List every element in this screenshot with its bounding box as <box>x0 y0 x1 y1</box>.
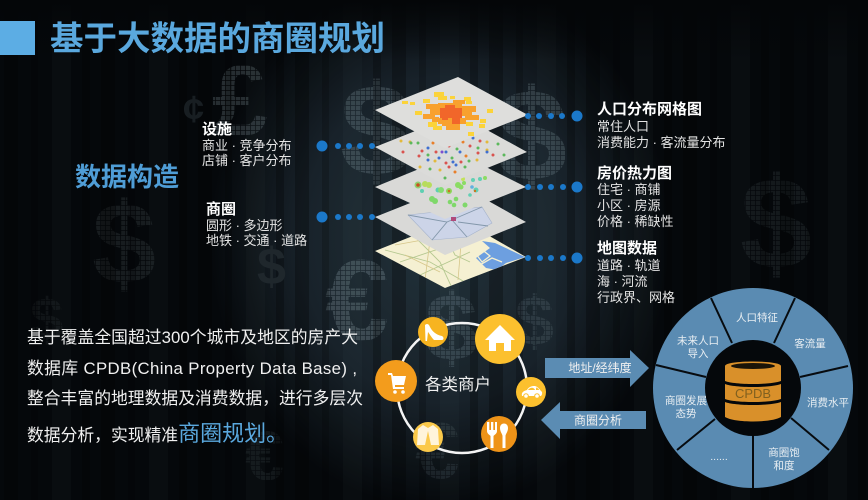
layer: house price heat map <box>375 153 526 219</box>
text block: 商圈: 商圈 <box>206 200 236 218</box>
wheel segment labels: 商圈发展 <box>665 394 707 407</box>
text block: 地图数据: 海 · 河流 <box>597 274 648 289</box>
background: dark dotted currency pattern: $ <box>92 180 156 308</box>
title: 基于大数据的商圈规划 <box>50 21 385 58</box>
text block: 地图数据: 行政界、网格 <box>597 290 675 305</box>
text block: 人口分布网格图: 消费能力 · 客流量分布 <box>597 135 726 150</box>
text block: 设施: 店铺 · 客户分布 <box>202 153 292 168</box>
connector dots: population grid <box>525 110 582 122</box>
icon: car <box>516 377 546 407</box>
text block: 设施: 设施 <box>202 120 232 138</box>
text block: 房价热力图 <box>597 164 674 229</box>
wheel segment labels: 态势 <box>676 407 697 420</box>
background: dark dotted currency pattern: £ <box>212 45 268 157</box>
wheel segment labels: 消费水平 <box>807 396 849 409</box>
connector dots: trade area <box>316 212 375 222</box>
text block: 房价热力图: 房价热力图 <box>597 164 672 182</box>
background: dark dotted currency pattern: € <box>245 417 284 495</box>
text block: 商圈: 地铁 · 交通 · 道路 <box>206 233 307 248</box>
description paragraph <box>27 328 363 446</box>
background: dark dotted currency pattern: $ <box>425 275 478 381</box>
icon: shopping cart <box>375 360 417 402</box>
background: dark dotted currency pattern: € <box>415 406 460 495</box>
arrow: trade area analysis <box>541 402 646 439</box>
arrow: address / coordinates <box>545 350 649 387</box>
icon: high heel <box>418 317 448 347</box>
CPDB data wheel <box>653 288 853 488</box>
background: dark dotted currency pattern: $ <box>340 57 412 203</box>
background: dark dotted currency pattern: $ <box>30 286 63 353</box>
wheel segment labels: 人口特征 <box>736 312 778 324</box>
layer stack <box>375 77 528 288</box>
background: dark dotted currency pattern: ¢ <box>183 89 204 131</box>
ring label: 各类商户 <box>425 375 491 394</box>
wheel segment labels: 导入 <box>688 348 709 360</box>
text block: 房价热力图: 小区 · 房源 <box>597 198 661 213</box>
layer: map data <box>375 236 526 288</box>
text block: 房价热力图: 住宅 · 商铺 <box>597 182 661 197</box>
layer: facility dots <box>375 114 527 185</box>
text block: 设施: 商业 · 竞争分布 <box>202 138 292 153</box>
text block: 设施 <box>202 120 292 168</box>
wheel segment labels: 客流量 <box>794 337 826 350</box>
arrow: trade area analysis: 商圈分析 <box>574 412 622 428</box>
connector dots: facilities <box>316 140 375 152</box>
merchant ring <box>375 314 546 453</box>
description paragraph: 数据分析，实现精准商圈规划。 <box>27 421 288 446</box>
text block: 商圈 <box>206 200 307 248</box>
wheel segment labels: 和度 <box>774 459 795 472</box>
title marker square <box>0 21 35 55</box>
icon: CPDB database cylinder <box>725 362 781 422</box>
wheel segment labels: ...... <box>710 451 728 463</box>
wheel segment labels: 商圈饱 <box>768 446 800 459</box>
text block: 地图数据: 道路 · 轨道 <box>597 258 661 273</box>
layer: trade area polygons <box>375 184 526 255</box>
icon: jacket <box>413 422 443 452</box>
text block: 商圈: 圆形 · 多边形 <box>206 218 283 233</box>
arrow: address / coordinates: 地址/经纬度 <box>568 360 632 375</box>
layer: population grid heat map <box>375 77 528 148</box>
wheel dividers <box>656 298 848 488</box>
background: dark dotted currency pattern: $ <box>257 238 286 296</box>
description paragraph: 整合丰富的地理数据及消费数据，进行多层次 <box>27 385 363 409</box>
icon: CPDB database cylinder: CPDB <box>735 386 771 401</box>
background: dark dotted currency pattern: $ <box>740 150 812 296</box>
text block: 地图数据 <box>597 239 675 305</box>
connector dots: map data <box>525 252 582 264</box>
background: dark dotted currency pattern: $ <box>515 282 554 360</box>
text block: 人口分布网格图 <box>597 100 726 150</box>
connector dots: house price <box>525 182 582 192</box>
text block: 房价热力图: 价格 · 稀缺性 <box>597 214 674 229</box>
text block: 地图数据: 地图数据 <box>597 239 657 257</box>
text block: 人口分布网格图: 人口分布网格图 <box>597 100 702 118</box>
wheel segment labels <box>665 312 849 472</box>
wheel segment labels: 未来人口 <box>677 335 719 347</box>
wheel hub <box>705 340 801 436</box>
background: dark dotted currency pattern: € <box>325 237 389 365</box>
background: dark dotted currency pattern: $ <box>495 62 567 208</box>
heading: 数据构造: 数据构造 <box>75 162 179 192</box>
icon: house <box>475 314 525 364</box>
description paragraph: 基于覆盖全国超过300个城市及地区的房产大 <box>27 328 358 347</box>
text block: 人口分布网格图: 常住人口 <box>597 119 649 134</box>
icon: fork and spoon <box>481 416 517 452</box>
description paragraph: 数据库 CPDB(China Property Data Base) , <box>27 359 357 378</box>
